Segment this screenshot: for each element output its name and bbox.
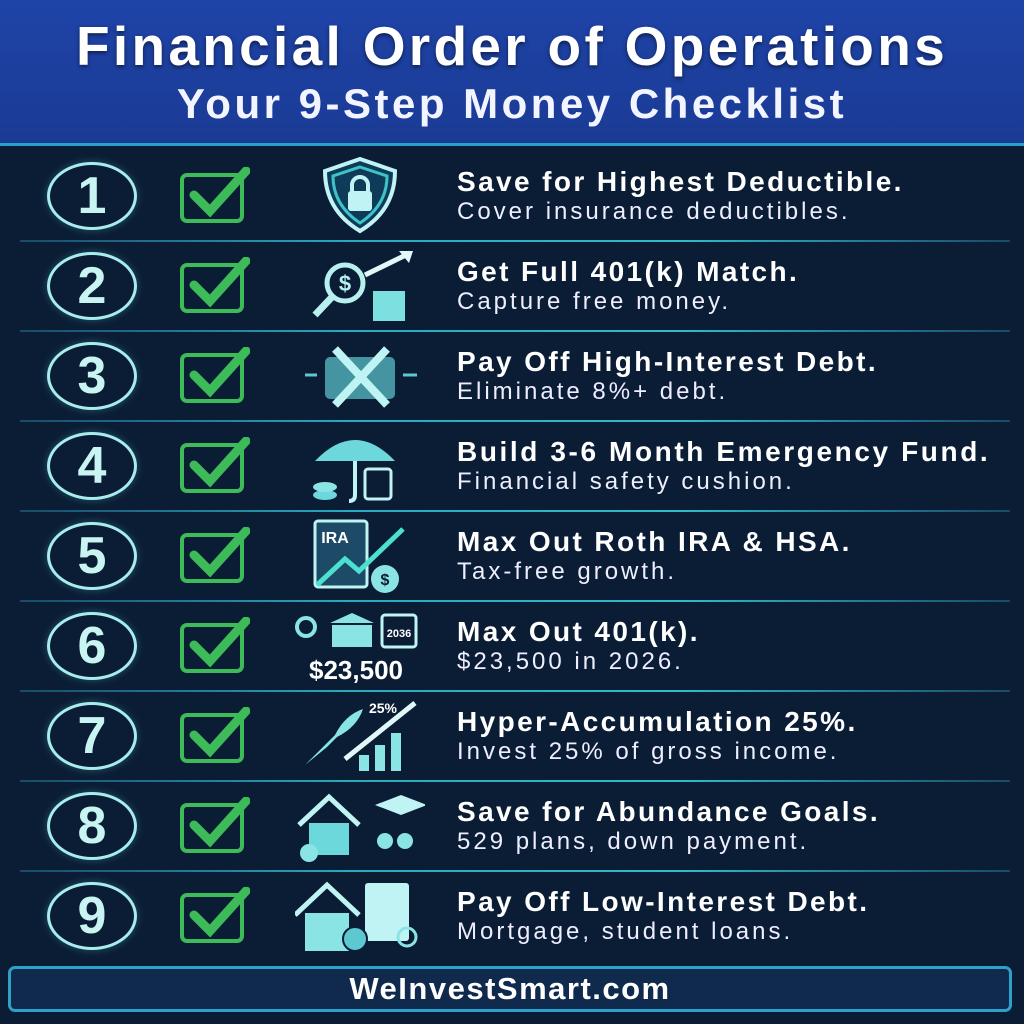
text: Tax-free growth. (457, 558, 677, 585)
text (457, 166, 904, 225)
number 9 (47, 882, 137, 950)
row 4 (44, 428, 990, 504)
checkbox (180, 797, 250, 853)
number 8 (47, 792, 137, 860)
row 5 (44, 518, 852, 594)
subtitle: Your 9-Step Money Checklist (177, 80, 847, 127)
row 9 (44, 878, 869, 954)
text: Invest 25% of gross income. (457, 738, 839, 765)
number 6: 6 (78, 617, 106, 675)
checkbox (180, 527, 250, 583)
row 2 (44, 248, 799, 324)
text (457, 256, 799, 315)
footer: WeInvestSmart.com (349, 971, 671, 1006)
icon: card crossed (305, 346, 417, 408)
text (457, 886, 869, 945)
text (457, 346, 878, 405)
text (457, 796, 880, 855)
row 1 (44, 156, 904, 234)
text: 529 plans, down payment. (457, 828, 809, 855)
number 3 (47, 342, 137, 410)
icon: bank 2036 $23,500 (295, 613, 418, 685)
text: Build 3-6 Month Emergency Fund. (457, 436, 990, 467)
number 5 (47, 522, 137, 590)
number 1: 1 (78, 167, 106, 225)
icon: IRA document chart: IRA (321, 530, 349, 547)
text: Save for Highest Deductible. (457, 166, 904, 197)
icon: magnifier dollar gift (312, 250, 413, 321)
footer (8, 966, 1012, 1012)
icon: house grad cap family (297, 794, 425, 862)
number 4: 4 (78, 437, 106, 495)
text: Save for Abundance Goals. (457, 796, 880, 827)
icon: bank 2036 $23,500: $23,500 (309, 655, 403, 685)
number 7: 7 (78, 707, 106, 765)
checkbox (180, 437, 250, 493)
icon: shield lock (323, 156, 397, 234)
header (0, 0, 1024, 146)
number 9: 9 (78, 887, 106, 945)
number 6 (47, 612, 137, 680)
text (457, 526, 852, 585)
text: Pay Off High-Interest Debt. (457, 346, 878, 377)
checkbox (180, 347, 250, 403)
text (457, 436, 990, 495)
icon: rocket growth: 25% (369, 700, 398, 716)
text: Get Full 401(k) Match. (457, 256, 799, 287)
title: Financial Order of Operations (76, 15, 948, 77)
text (457, 616, 700, 675)
checkbox (180, 617, 250, 673)
icon: IRA document chart (314, 520, 405, 593)
row 3 (44, 338, 878, 414)
text: $23,500 in 2026. (457, 648, 684, 675)
number 7 (47, 702, 137, 770)
icon: magnifier dollar gift: $ (339, 271, 351, 296)
number 2: 2 (78, 257, 106, 315)
checkbox (180, 257, 250, 313)
text: Max Out Roth IRA & HSA. (457, 526, 852, 557)
icon: umbrella safe (313, 440, 395, 503)
row 8 (44, 788, 880, 864)
text: Mortgage, student loans. (457, 918, 793, 945)
text: Financial safety cushion. (457, 468, 795, 495)
icon: bank 2036 $23,500: 2036 (387, 628, 411, 640)
checkbox (180, 887, 250, 943)
icon: IRA document chart: $ (381, 572, 390, 589)
checkbox (180, 707, 250, 763)
text: Hyper-Accumulation 25%. (457, 706, 858, 737)
text: Eliminate 8%+ debt. (457, 378, 728, 405)
number 4 (47, 432, 137, 500)
checkbox (180, 167, 250, 223)
text: Capture free money. (457, 288, 731, 315)
text: Pay Off Low-Interest Debt. (457, 886, 869, 917)
row 7 (44, 698, 858, 774)
icon: house document (295, 882, 418, 951)
text (457, 706, 858, 765)
text: Max Out 401(k). (457, 616, 700, 647)
number 1 (47, 162, 137, 230)
number 3: 3 (78, 347, 106, 405)
number 8: 8 (78, 797, 106, 855)
number 5: 5 (78, 527, 106, 585)
row 6 (44, 608, 700, 685)
icon: rocket growth (305, 700, 416, 771)
number 2 (47, 252, 137, 320)
text: Cover insurance deductibles. (457, 198, 851, 225)
